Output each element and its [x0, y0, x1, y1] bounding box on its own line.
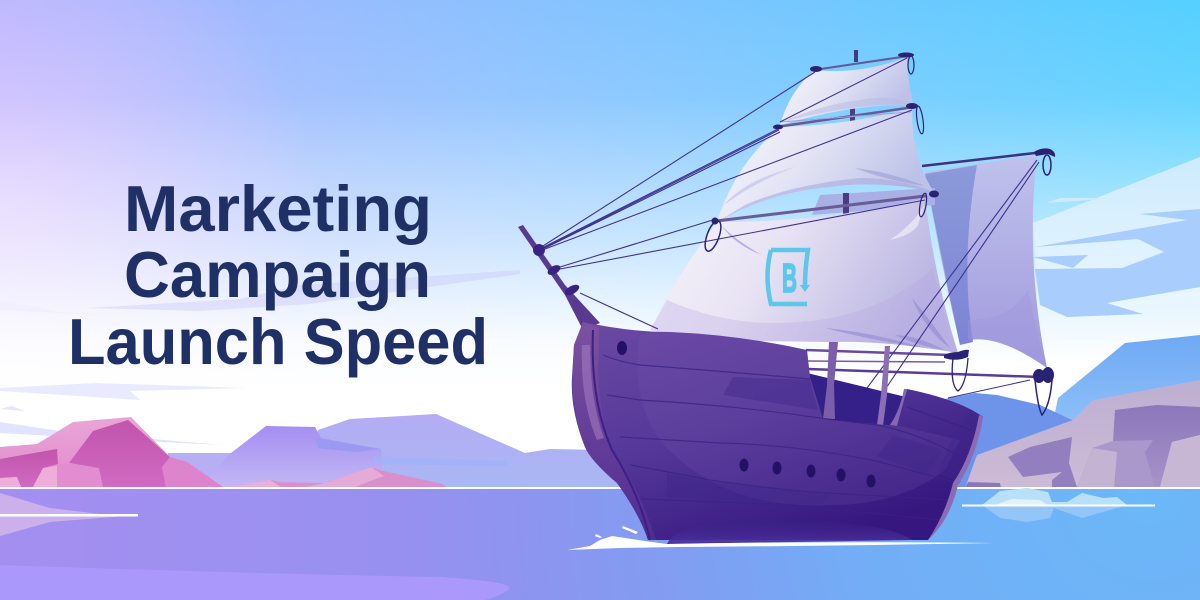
sea	[0, 487, 1200, 600]
main sail	[650, 198, 958, 353]
title: Marketing	[124, 173, 432, 245]
middle sail	[717, 108, 934, 222]
clouds: left	[0, 270, 520, 445]
rope loops and knots	[702, 52, 1055, 415]
title: Campaign	[124, 239, 431, 311]
planks	[603, 355, 977, 520]
wake	[567, 526, 995, 550]
small sail behind	[812, 188, 935, 215]
darker plank blocks	[667, 377, 983, 507]
logo on main sail: B	[782, 255, 797, 301]
foreground water shape	[0, 565, 510, 600]
hull	[572, 322, 983, 544]
deck interior and lower masts	[807, 342, 906, 428]
rear sail	[925, 155, 1047, 368]
right rock cliff	[965, 380, 1200, 488]
stern rim	[928, 415, 983, 540]
railing cut	[890, 389, 907, 426]
distant blue mountains right	[940, 335, 1200, 488]
portholes	[617, 341, 876, 488]
hull highlight	[638, 332, 960, 505]
rigging ropes	[543, 58, 1039, 397]
pink rocks left	[0, 417, 446, 487]
yards on sails	[716, 56, 925, 221]
title	[68, 173, 488, 378]
left shore reflection	[0, 493, 138, 536]
masts and yards behind sails	[806, 50, 1040, 398]
purple mountains left	[168, 414, 650, 488]
clouds: right	[960, 157, 1200, 400]
stem post	[573, 322, 656, 540]
ice floe	[962, 488, 1155, 522]
hull bottom shade	[667, 520, 912, 544]
title: Launch Speed	[68, 306, 488, 378]
logo on main sail	[768, 250, 810, 304]
top sail	[780, 57, 914, 125]
ship	[518, 50, 1055, 550]
bowsprit	[518, 225, 600, 330]
